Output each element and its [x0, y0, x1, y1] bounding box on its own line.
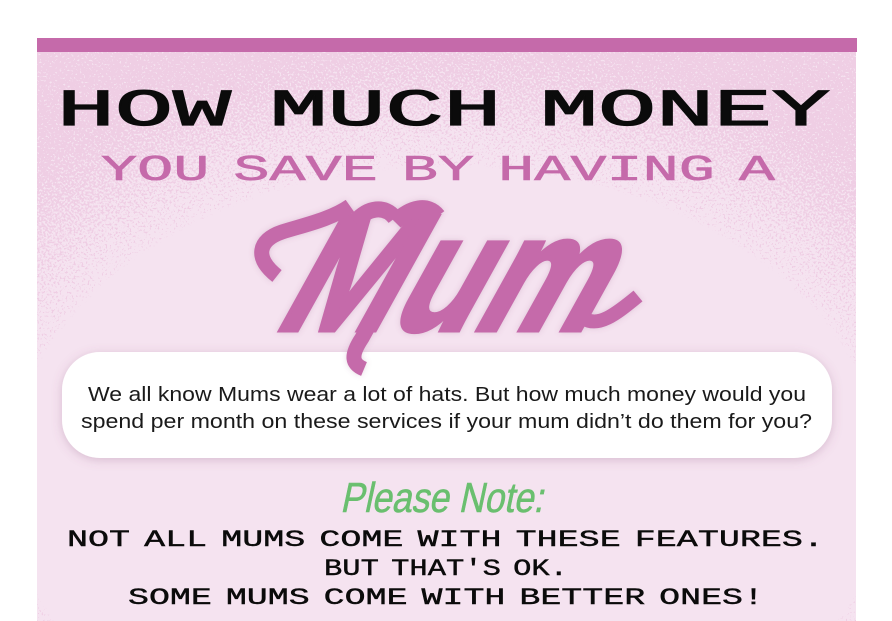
heading: please note: Please Note: [338, 474, 551, 521]
top band [37, 38, 857, 52]
callout: intro box: spend per month on these services if your mum didn’t do them for you? [81, 411, 812, 433]
text block: note [67, 527, 824, 611]
text block: note: NOT ALL MUMS COME WITH THESE FEATURES. [67, 527, 824, 553]
heading: Mum script: Mum [251, 181, 672, 365]
text block: note: SOME MUMS COME WITH BETTER ONES! [128, 585, 764, 611]
subtitle: you save by having a: YOU SAVE BY HAVING A [101, 150, 776, 191]
title: how much money: HOW MUCH MONEY [57, 82, 830, 141]
text block: note: BUT THAT'S OK. [324, 556, 568, 582]
callout: intro box [62, 352, 832, 458]
callout: intro box: We all know Mums wear a lot of hats. But how much money would you [88, 384, 806, 406]
